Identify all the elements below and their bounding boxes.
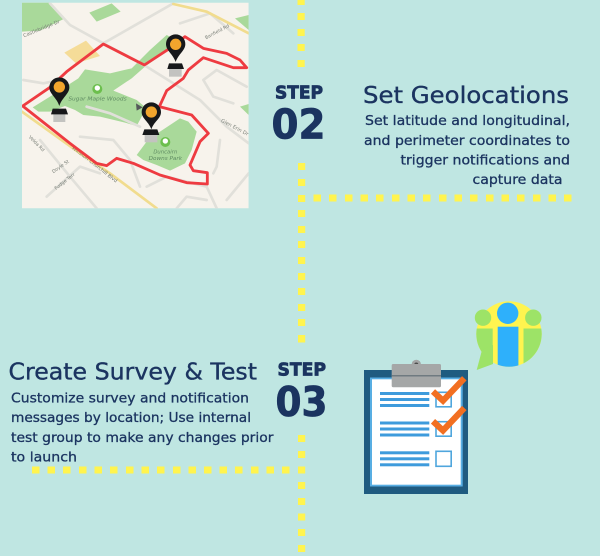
step 03 label: 03 [276, 378, 328, 426]
text block: create survey and test: Customize survey and notification [11, 390, 249, 406]
heading: set geolocations: Set Geolocations [363, 81, 569, 109]
map labels: Duncairn [153, 149, 177, 155]
map labels: Downs Park [149, 156, 183, 162]
park icons [92, 84, 102, 94]
map labels: Winston Churchill Blvd [70, 145, 118, 184]
text block: create survey and test [11, 390, 274, 466]
map block [64, 41, 100, 63]
checkboxes [436, 392, 451, 466]
icon: people speech bubble [474, 301, 542, 370]
step 02 label: 02 [272, 100, 326, 148]
step 03 label: STEP [278, 360, 326, 380]
map roads [23, 3, 249, 208]
cursor [136, 103, 143, 111]
text block: set geolocations [364, 113, 570, 188]
map route [23, 37, 247, 184]
checklist lines [380, 392, 429, 466]
map labels: Doyle St [51, 159, 71, 175]
map with geolocation route [22, 3, 250, 208]
map labels: Velda Rd [27, 135, 46, 153]
map labels: Castlebridge Dr [23, 19, 62, 39]
map labels: Fudge Terr [54, 172, 76, 192]
pin 1 [49, 77, 69, 122]
step 02 label: STEP [275, 82, 323, 104]
text block: create survey and test: to launch [11, 450, 77, 466]
text block: set geolocations: trigger notifications and [400, 152, 570, 168]
check marks [433, 378, 464, 430]
icon: clipboard checklist [364, 360, 468, 494]
pin 2 [166, 34, 185, 77]
map labels: Glen Erin Dr [220, 118, 250, 138]
text block: set geolocations: Set latitude and longitudinal, [365, 113, 570, 129]
pin 3 [142, 102, 161, 142]
text block: create survey and test: test group to make any changes prior [11, 430, 274, 446]
text block: create survey and test: messages by location; Use internal [11, 410, 251, 426]
text block: set geolocations: capture data [472, 172, 562, 188]
step 02 label [272, 82, 326, 148]
map labels [23, 19, 250, 192]
map labels: Banfield Rd [204, 23, 231, 41]
text block: set geolocations: and perimeter coordinates to [364, 133, 570, 149]
step 03 label [276, 360, 328, 426]
map labels: Sugar Maple Woods [68, 97, 127, 103]
clip [392, 360, 441, 387]
map parks [22, 3, 249, 171]
heading: create survey and test: Create Survey & Test [8, 358, 257, 386]
map highways [22, 4, 249, 208]
